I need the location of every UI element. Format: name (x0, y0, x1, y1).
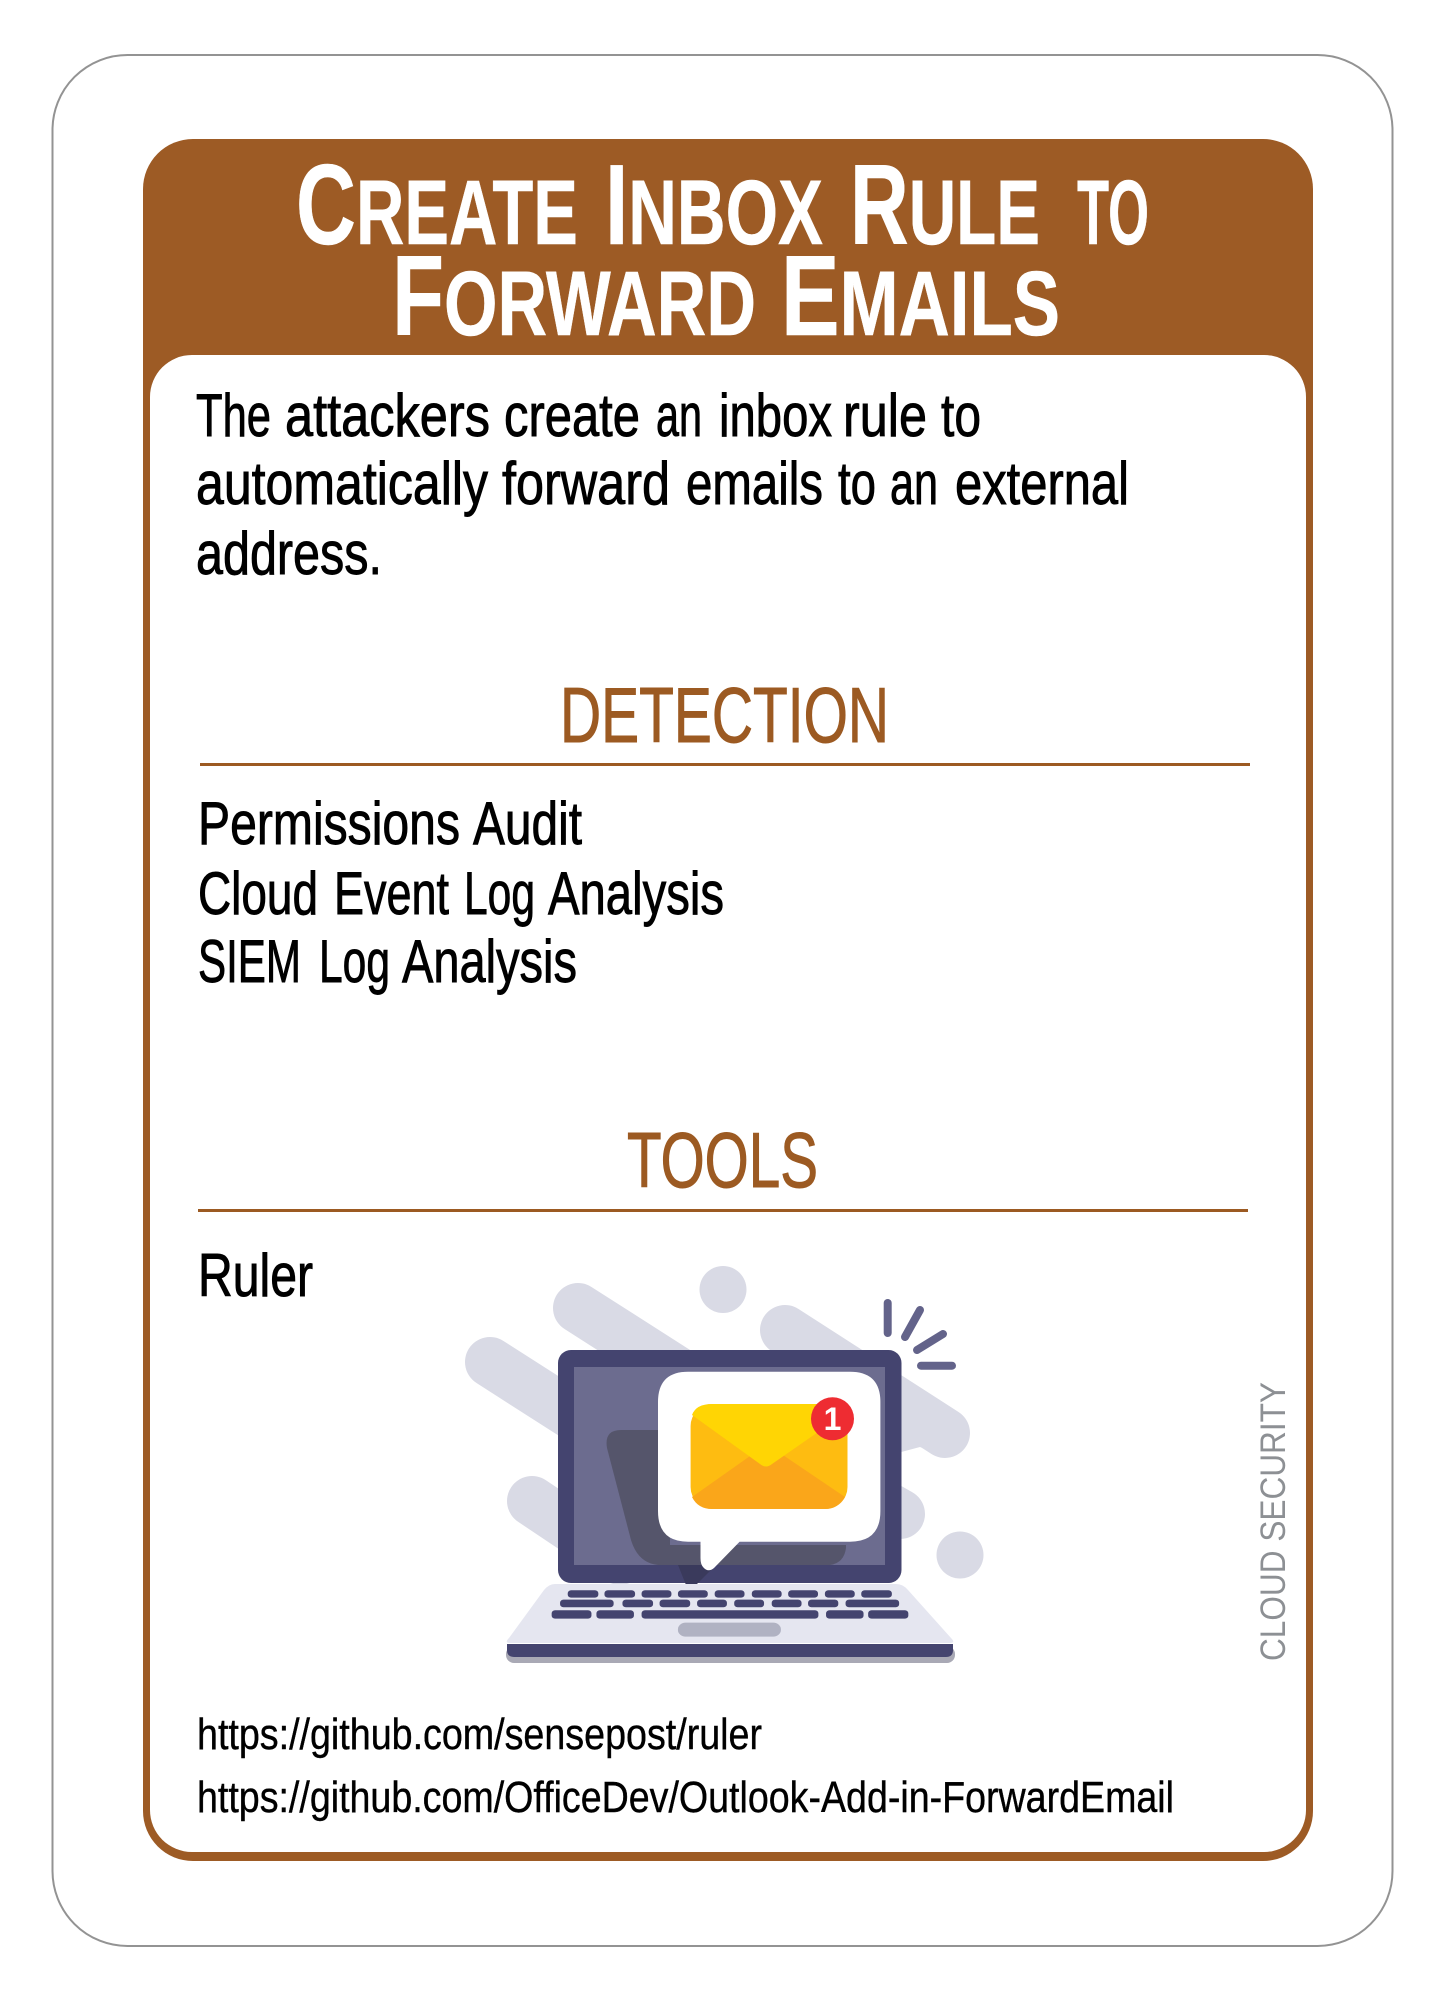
speech bubble (658, 1372, 880, 1570)
detection list: Log (319, 928, 390, 995)
detection list: Log (464, 860, 535, 927)
panel: brown card frame (143, 139, 1313, 1861)
notification badge: 1 (824, 1401, 841, 1437)
detection list: Analysis (402, 928, 577, 995)
detection list: Cloud (198, 860, 318, 927)
title: TO (1077, 162, 1149, 264)
description text: an (890, 450, 938, 517)
detection list: SIEM (198, 928, 301, 995)
description text: automatically (196, 450, 488, 517)
tools list: Ruler (198, 1242, 313, 1309)
description text: forward (502, 450, 670, 517)
detection list: Event (334, 860, 449, 927)
description text: address. (196, 520, 382, 587)
title: FORWARD (392, 233, 756, 360)
title (296, 142, 1149, 360)
description text: inbox (719, 382, 832, 449)
description text: emails (686, 450, 823, 517)
tool links: https://github.com/sensepost/ruler (197, 1710, 762, 1759)
title: RULE (850, 142, 1040, 269)
keyboard base (506, 1584, 955, 1663)
notification ticks (888, 1303, 952, 1366)
description text: The (196, 382, 271, 449)
panel: white card body (150, 355, 1306, 1852)
envelope (691, 1404, 848, 1509)
description text (196, 382, 1129, 587)
description text: to (941, 382, 981, 449)
tool links: https://github.com/OfficeDev/Outlook-Add-in-ForwardEmail (197, 1773, 1174, 1822)
heading: detection: DETECTION (560, 671, 889, 759)
description text: rule (843, 382, 927, 449)
description text: external (955, 450, 1129, 517)
description text: to (838, 450, 876, 517)
title: INBOX (605, 142, 823, 269)
laptop lid (558, 1350, 902, 1588)
notification badge (811, 1397, 854, 1440)
description text: create (504, 382, 640, 449)
detection list: Analysis (548, 860, 724, 927)
detection list: Audit (473, 790, 582, 857)
vertical label: cloud security: CLOUD SECURITY (1254, 1382, 1293, 1661)
tool links (197, 1710, 1174, 1822)
heading: tools: TOOLS (627, 1116, 818, 1204)
description text: an (656, 382, 702, 449)
description text: attackers (285, 382, 490, 449)
icon: laptop with email notification (490, 1266, 984, 1663)
title: CREATE (296, 142, 578, 269)
detection list: Permissions (198, 790, 460, 857)
detection list (198, 790, 724, 995)
background shapes (490, 1266, 984, 1578)
title: EMAILS (781, 233, 1060, 360)
